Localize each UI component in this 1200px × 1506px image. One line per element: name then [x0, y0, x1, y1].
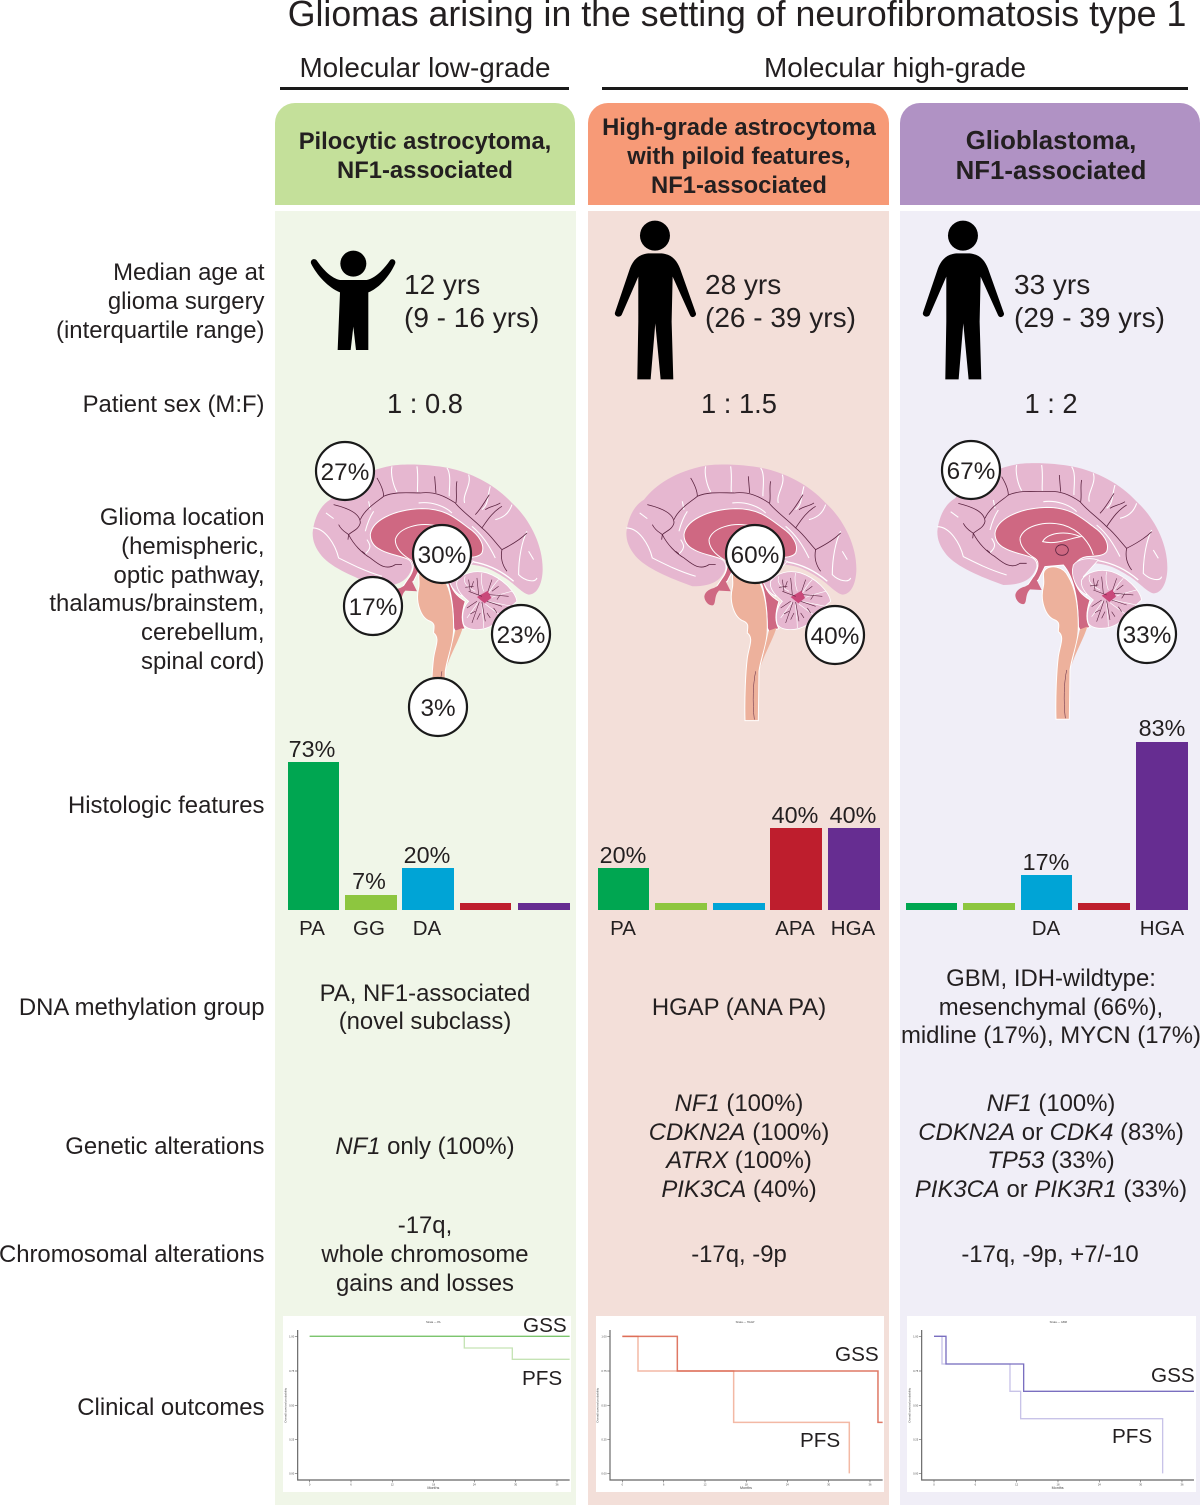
survival chart: Overall survival probability — [596, 1387, 600, 1423]
icon: adult silhouette — [615, 221, 696, 379]
bar chart: histologic features: 40% — [772, 802, 818, 828]
survival chart: Months — [740, 1486, 752, 1490]
bar chart: histologic features: HGA — [1140, 917, 1185, 940]
heading: molecular low-grade: Molecular low-grade — [299, 52, 551, 83]
survival chart: 0.00 — [601, 1471, 607, 1475]
median age: 33 yrs — [1014, 269, 1090, 300]
panel header — [588, 103, 889, 205]
location: cerebellum: 33% — [1123, 622, 1171, 649]
heading: molecular high-grade: Molecular high-grade — [764, 52, 1026, 83]
bar chart: histologic features: 20% — [600, 842, 646, 868]
panel background — [275, 211, 576, 1505]
bar chart: histologic features: 40% — [830, 802, 876, 828]
methylation group: GBM, IDH-wildtype: — [946, 965, 1156, 992]
label: glioma location: thalamus/brainstem, — [49, 590, 264, 617]
survival chart: 6 — [975, 1483, 977, 1487]
methylation group: midline (17%), MYCN (17%) — [901, 1022, 1200, 1049]
label: chromosomal alterations: Chromosomal alterations — [0, 1241, 265, 1268]
label: median age: glioma surgery — [108, 288, 265, 315]
survival chart: 6 — [350, 1483, 352, 1487]
survival chart: Overall survival probability — [907, 1387, 911, 1423]
panel header: Pilocytic astrocytoma, — [299, 128, 551, 155]
location: thalamus/brainstem — [726, 525, 784, 583]
label: patient sex: Patient sex (M:F) — [83, 391, 264, 418]
survival chart — [907, 1316, 1196, 1492]
bar chart: histologic features: APA — [775, 917, 815, 940]
panel background — [900, 211, 1200, 1505]
genetic alterations: or PIK3R1 (33%) — [1006, 1176, 1187, 1203]
survival chart: 0.50 — [913, 1403, 919, 1407]
location: spinal cord: 3% — [420, 695, 456, 722]
bar chart: histologic features: PA — [299, 917, 325, 940]
chromosomal alterations: -17q, -9p — [691, 1241, 787, 1268]
genetic alterations: (100%) — [735, 1147, 812, 1174]
panel header: NF1-associated — [337, 157, 513, 184]
location: thalamus/brainstem: 30% — [418, 542, 466, 569]
methylation group: HGAP (ANA PA) — [652, 994, 826, 1021]
chromosomal alterations: -17q, -9p, +7/-10 — [961, 1241, 1139, 1268]
bar chart: histologic features: 7% — [352, 868, 386, 894]
bar chart: histologic features: 83% — [1139, 715, 1185, 741]
panel background — [588, 211, 889, 1505]
survival chart: 18 — [1056, 1483, 1060, 1487]
panel: high-grade astrocytoma with piloid features — [588, 103, 889, 1505]
panel header: High-grade astrocytoma — [602, 114, 876, 141]
survival chart: 12 — [391, 1483, 394, 1487]
genetic alterations: (33%) — [1051, 1147, 1115, 1174]
survival chart: 1.00 — [601, 1334, 607, 1338]
survival chart: GSS — [523, 1314, 567, 1337]
chromosomal alterations: gains and losses — [336, 1270, 514, 1297]
bar chart: histologic features: PA — [610, 917, 636, 940]
bar chart: histologic features: 73% — [289, 736, 335, 762]
panel: pilocytic astrocytoma — [275, 103, 576, 1505]
survival chart: 0.75 — [913, 1369, 919, 1373]
chromosomal alterations: -17q, — [398, 1212, 452, 1239]
label: glioma location: cerebellum, — [141, 619, 264, 646]
bar chart: histologic features — [598, 802, 880, 940]
genetic alterations: (100%) — [752, 1119, 829, 1146]
bar chart: histologic features: HGA — [831, 917, 876, 940]
chromosomal alterations: whole chromosome — [320, 1241, 529, 1268]
survival chart: 30 — [827, 1483, 831, 1487]
survival chart: 0 — [309, 1483, 311, 1487]
label: median age: Median age at — [113, 259, 264, 286]
survival chart: 36 — [868, 1483, 872, 1487]
genetic alterations: NF1 only (100%) — [335, 1133, 515, 1160]
panel header: NF1-associated — [956, 157, 1146, 185]
survival chart: Strata — PA — [426, 1320, 441, 1324]
location: hemispheric: 27% — [321, 459, 369, 486]
genetic alterations: (40%) — [753, 1176, 817, 1203]
survival chart: Strata — HGAP — [736, 1320, 755, 1324]
location: optic pathway — [344, 577, 402, 635]
location: thalamus/brainstem: 60% — [731, 542, 779, 569]
survival chart: 0.75 — [289, 1369, 295, 1373]
median age: 28 yrs — [705, 269, 781, 300]
survival chart: 6 — [663, 1483, 665, 1487]
patient sex ratio: 1 : 2 — [1024, 388, 1078, 419]
genetic alterations: PIK3CA — [915, 1176, 1000, 1203]
icon: adult silhouette — [923, 221, 1004, 379]
location: cerebellum — [492, 605, 550, 663]
survival chart: 0.25 — [289, 1437, 295, 1441]
methylation group: mesenchymal (66%), — [939, 994, 1163, 1021]
survival chart: Months — [427, 1486, 439, 1490]
survival chart: 36 — [555, 1483, 559, 1487]
panel header — [275, 103, 575, 205]
location: hemispheric — [942, 441, 1000, 499]
methylation group: PA, NF1-associated — [320, 980, 530, 1007]
panel header — [900, 103, 1200, 205]
location: cerebellum — [1118, 605, 1176, 663]
median age: (29 - 39 yrs) — [1014, 302, 1165, 333]
survival chart: PFS — [522, 1367, 562, 1390]
bar chart: histologic features: DA — [413, 917, 442, 940]
genetic alterations: or CDK4 (83%) — [1022, 1119, 1184, 1146]
survival chart: GSS — [835, 1343, 879, 1366]
genetic alterations: NF1 (100%) — [675, 1090, 803, 1117]
location: thalamus/brainstem — [413, 525, 471, 583]
survival chart: 30 — [514, 1483, 518, 1487]
genetic alterations: ATRX — [664, 1147, 729, 1174]
survival chart: Overall survival probability — [283, 1387, 287, 1423]
genetic alterations: PIK3CA — [661, 1176, 746, 1203]
location: hemispheric: 67% — [947, 458, 995, 485]
survival chart: PFS — [1112, 1425, 1152, 1448]
genetic alterations: CDKN2A — [649, 1119, 746, 1146]
panel header: with piloid features, — [626, 143, 851, 170]
bar chart: histologic features — [288, 736, 570, 940]
survival chart: 0.00 — [913, 1471, 919, 1475]
methylation group: (novel subclass) — [339, 1008, 511, 1035]
survival chart: 24 — [1098, 1483, 1101, 1487]
location: optic pathway: 17% — [349, 594, 397, 621]
label: clinical outcomes: Clinical outcomes — [77, 1394, 265, 1421]
survival chart: 30 — [1139, 1483, 1143, 1487]
survival chart: Strata — GBM — [1050, 1320, 1067, 1324]
label: histologic features: Histologic features — [68, 792, 265, 819]
brain illustration — [313, 464, 543, 721]
panel: glioblastoma — [900, 103, 1200, 1505]
heading: molecular high-grade — [602, 52, 1188, 90]
survival chart: 18 — [745, 1483, 748, 1487]
patient sex ratio: 1 : 1.5 — [701, 388, 777, 419]
survival chart: 0 — [622, 1483, 624, 1487]
survival chart — [596, 1316, 884, 1492]
location: cerebellum: 40% — [811, 623, 859, 650]
survival chart: 0.00 — [289, 1471, 295, 1475]
survival chart: 0.25 — [913, 1437, 919, 1441]
survival chart: 0.50 — [289, 1403, 295, 1407]
label: genetic alterations: Genetic alterations — [65, 1133, 265, 1160]
panel header: NF1-associated — [651, 172, 827, 199]
label: DNA methylation group: DNA methylation group — [19, 994, 264, 1021]
bar chart: histologic features: GG — [353, 917, 385, 940]
survival chart: 18 — [432, 1483, 436, 1487]
survival chart: 0.75 — [601, 1369, 607, 1373]
survival chart: 0 — [933, 1483, 935, 1487]
label: glioma location: spinal cord) — [141, 648, 264, 675]
survival chart: 0.25 — [601, 1437, 607, 1441]
genetic alterations: TP53 — [987, 1147, 1045, 1174]
survival chart: 12 — [1015, 1483, 1019, 1487]
median age: (9 - 16 yrs) — [404, 302, 539, 333]
survival chart: 36 — [1180, 1483, 1184, 1487]
bar chart: histologic features: 20% — [404, 842, 450, 868]
row labels — [0, 259, 265, 1421]
bar chart: histologic features: DA — [1032, 917, 1061, 940]
survival chart: 24 — [473, 1483, 476, 1487]
survival chart: 24 — [786, 1483, 789, 1487]
bar chart: histologic features: 17% — [1023, 849, 1069, 875]
genetic alterations: CDKN2A — [918, 1119, 1015, 1146]
survival chart: 12 — [704, 1483, 707, 1487]
brain illustration — [937, 463, 1167, 719]
location: cerebellum: 23% — [497, 622, 545, 649]
survival chart — [283, 1314, 571, 1492]
bar chart: histologic features — [906, 715, 1188, 940]
location: spinal cord — [409, 678, 467, 736]
genetic alterations: NF1 (100%) — [987, 1090, 1115, 1117]
icon: child silhouette — [311, 251, 395, 350]
survival chart: Months — [1052, 1486, 1064, 1490]
location: cerebellum — [806, 606, 864, 664]
survival chart: GSS — [1151, 1364, 1195, 1387]
location: hemispheric — [316, 442, 374, 500]
median age: 12 yrs — [404, 269, 480, 300]
survival chart: 0.50 — [601, 1403, 607, 1407]
survival chart: PFS — [800, 1429, 840, 1452]
survival chart: 1.00 — [913, 1334, 919, 1338]
survival chart: 1.00 — [289, 1334, 295, 1338]
label: glioma location: Glioma location — [100, 504, 264, 531]
label: glioma location: optic pathway, — [114, 562, 264, 589]
median age: (26 - 39 yrs) — [705, 302, 856, 333]
patient sex ratio: 1 : 0.8 — [387, 388, 463, 419]
brain illustration — [626, 464, 856, 721]
label: median age: (interquartile range) — [56, 317, 264, 344]
panel header: Glioblastoma, — [966, 127, 1136, 155]
label: glioma location: (hemispheric, — [121, 533, 264, 560]
